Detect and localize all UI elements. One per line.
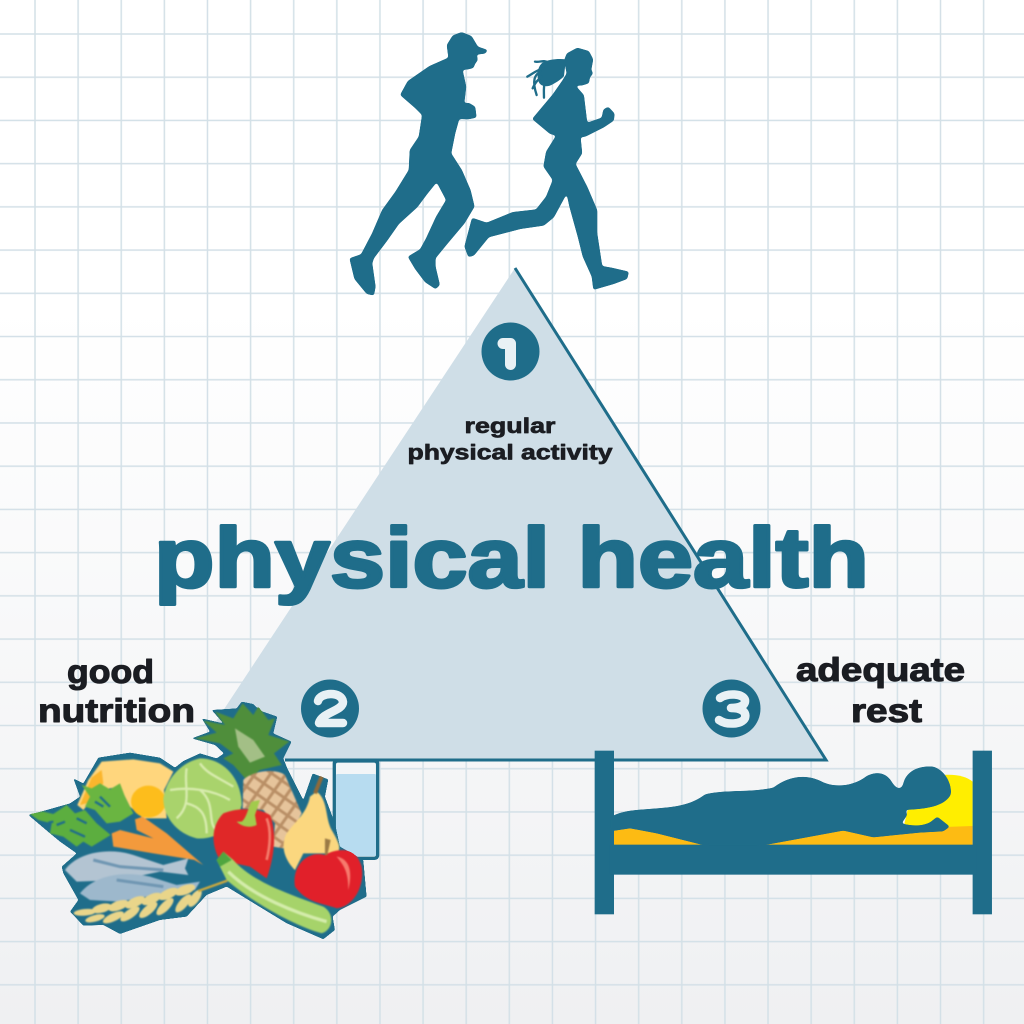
lemon slice xyxy=(131,786,166,818)
apple highlight xyxy=(337,857,350,890)
label: physical activity: physical activity xyxy=(408,442,613,464)
apple stem xyxy=(325,838,331,855)
lemon xyxy=(77,759,173,818)
badge: number 1 xyxy=(482,322,540,380)
pineapple body xyxy=(243,771,302,848)
label: adequate rest: adequate xyxy=(796,651,965,688)
bed frame xyxy=(595,751,992,914)
cabbage veins xyxy=(170,763,233,833)
glass of water xyxy=(333,759,379,860)
pepper highlight xyxy=(267,818,270,860)
zucchini tip xyxy=(217,852,232,867)
pepper xyxy=(214,809,274,878)
carrot greens xyxy=(82,783,133,823)
carrots xyxy=(112,817,203,865)
mattress xyxy=(613,826,973,845)
pillow xyxy=(903,775,973,828)
fish lower xyxy=(80,874,200,902)
lemon orange tip xyxy=(80,770,103,805)
woman ponytail xyxy=(538,59,566,86)
label: adequate rest xyxy=(796,651,965,729)
label: good nutrition: nutrition xyxy=(38,692,195,729)
pineapple highlight xyxy=(235,728,265,763)
pineapple leaves xyxy=(195,703,289,780)
label: good nutrition xyxy=(38,653,195,729)
title: physical health: physical health xyxy=(154,511,869,605)
carrot greens flecks xyxy=(48,797,110,837)
label: regular: regular xyxy=(464,415,556,438)
icon: bed with sleeping person xyxy=(595,751,992,914)
zucchini highlight xyxy=(228,872,327,922)
woman hair strands xyxy=(527,61,548,98)
badge: number 2 xyxy=(301,680,359,738)
runner: woman xyxy=(464,48,629,290)
pear stem xyxy=(315,777,322,793)
food backing outline xyxy=(28,702,367,939)
fish xyxy=(65,851,188,882)
wheat stem xyxy=(198,881,227,891)
icon: runners silhouettes xyxy=(349,32,629,296)
pyramid triangle xyxy=(205,268,828,761)
apple xyxy=(295,850,362,908)
food items xyxy=(28,702,367,939)
label: good nutrition: good xyxy=(67,653,154,690)
icon: food group xyxy=(28,702,379,939)
runner: man xyxy=(349,32,488,296)
pepper stem xyxy=(237,800,260,827)
carrot greens lower xyxy=(30,805,111,847)
fish stripes xyxy=(93,860,163,887)
badge: number 3 xyxy=(702,680,760,738)
cabbage xyxy=(163,758,242,838)
wheat xyxy=(73,882,204,926)
zucchini xyxy=(217,852,331,933)
label: adequate rest: rest xyxy=(851,692,922,729)
sleeping person xyxy=(610,766,951,846)
pear xyxy=(284,792,339,870)
